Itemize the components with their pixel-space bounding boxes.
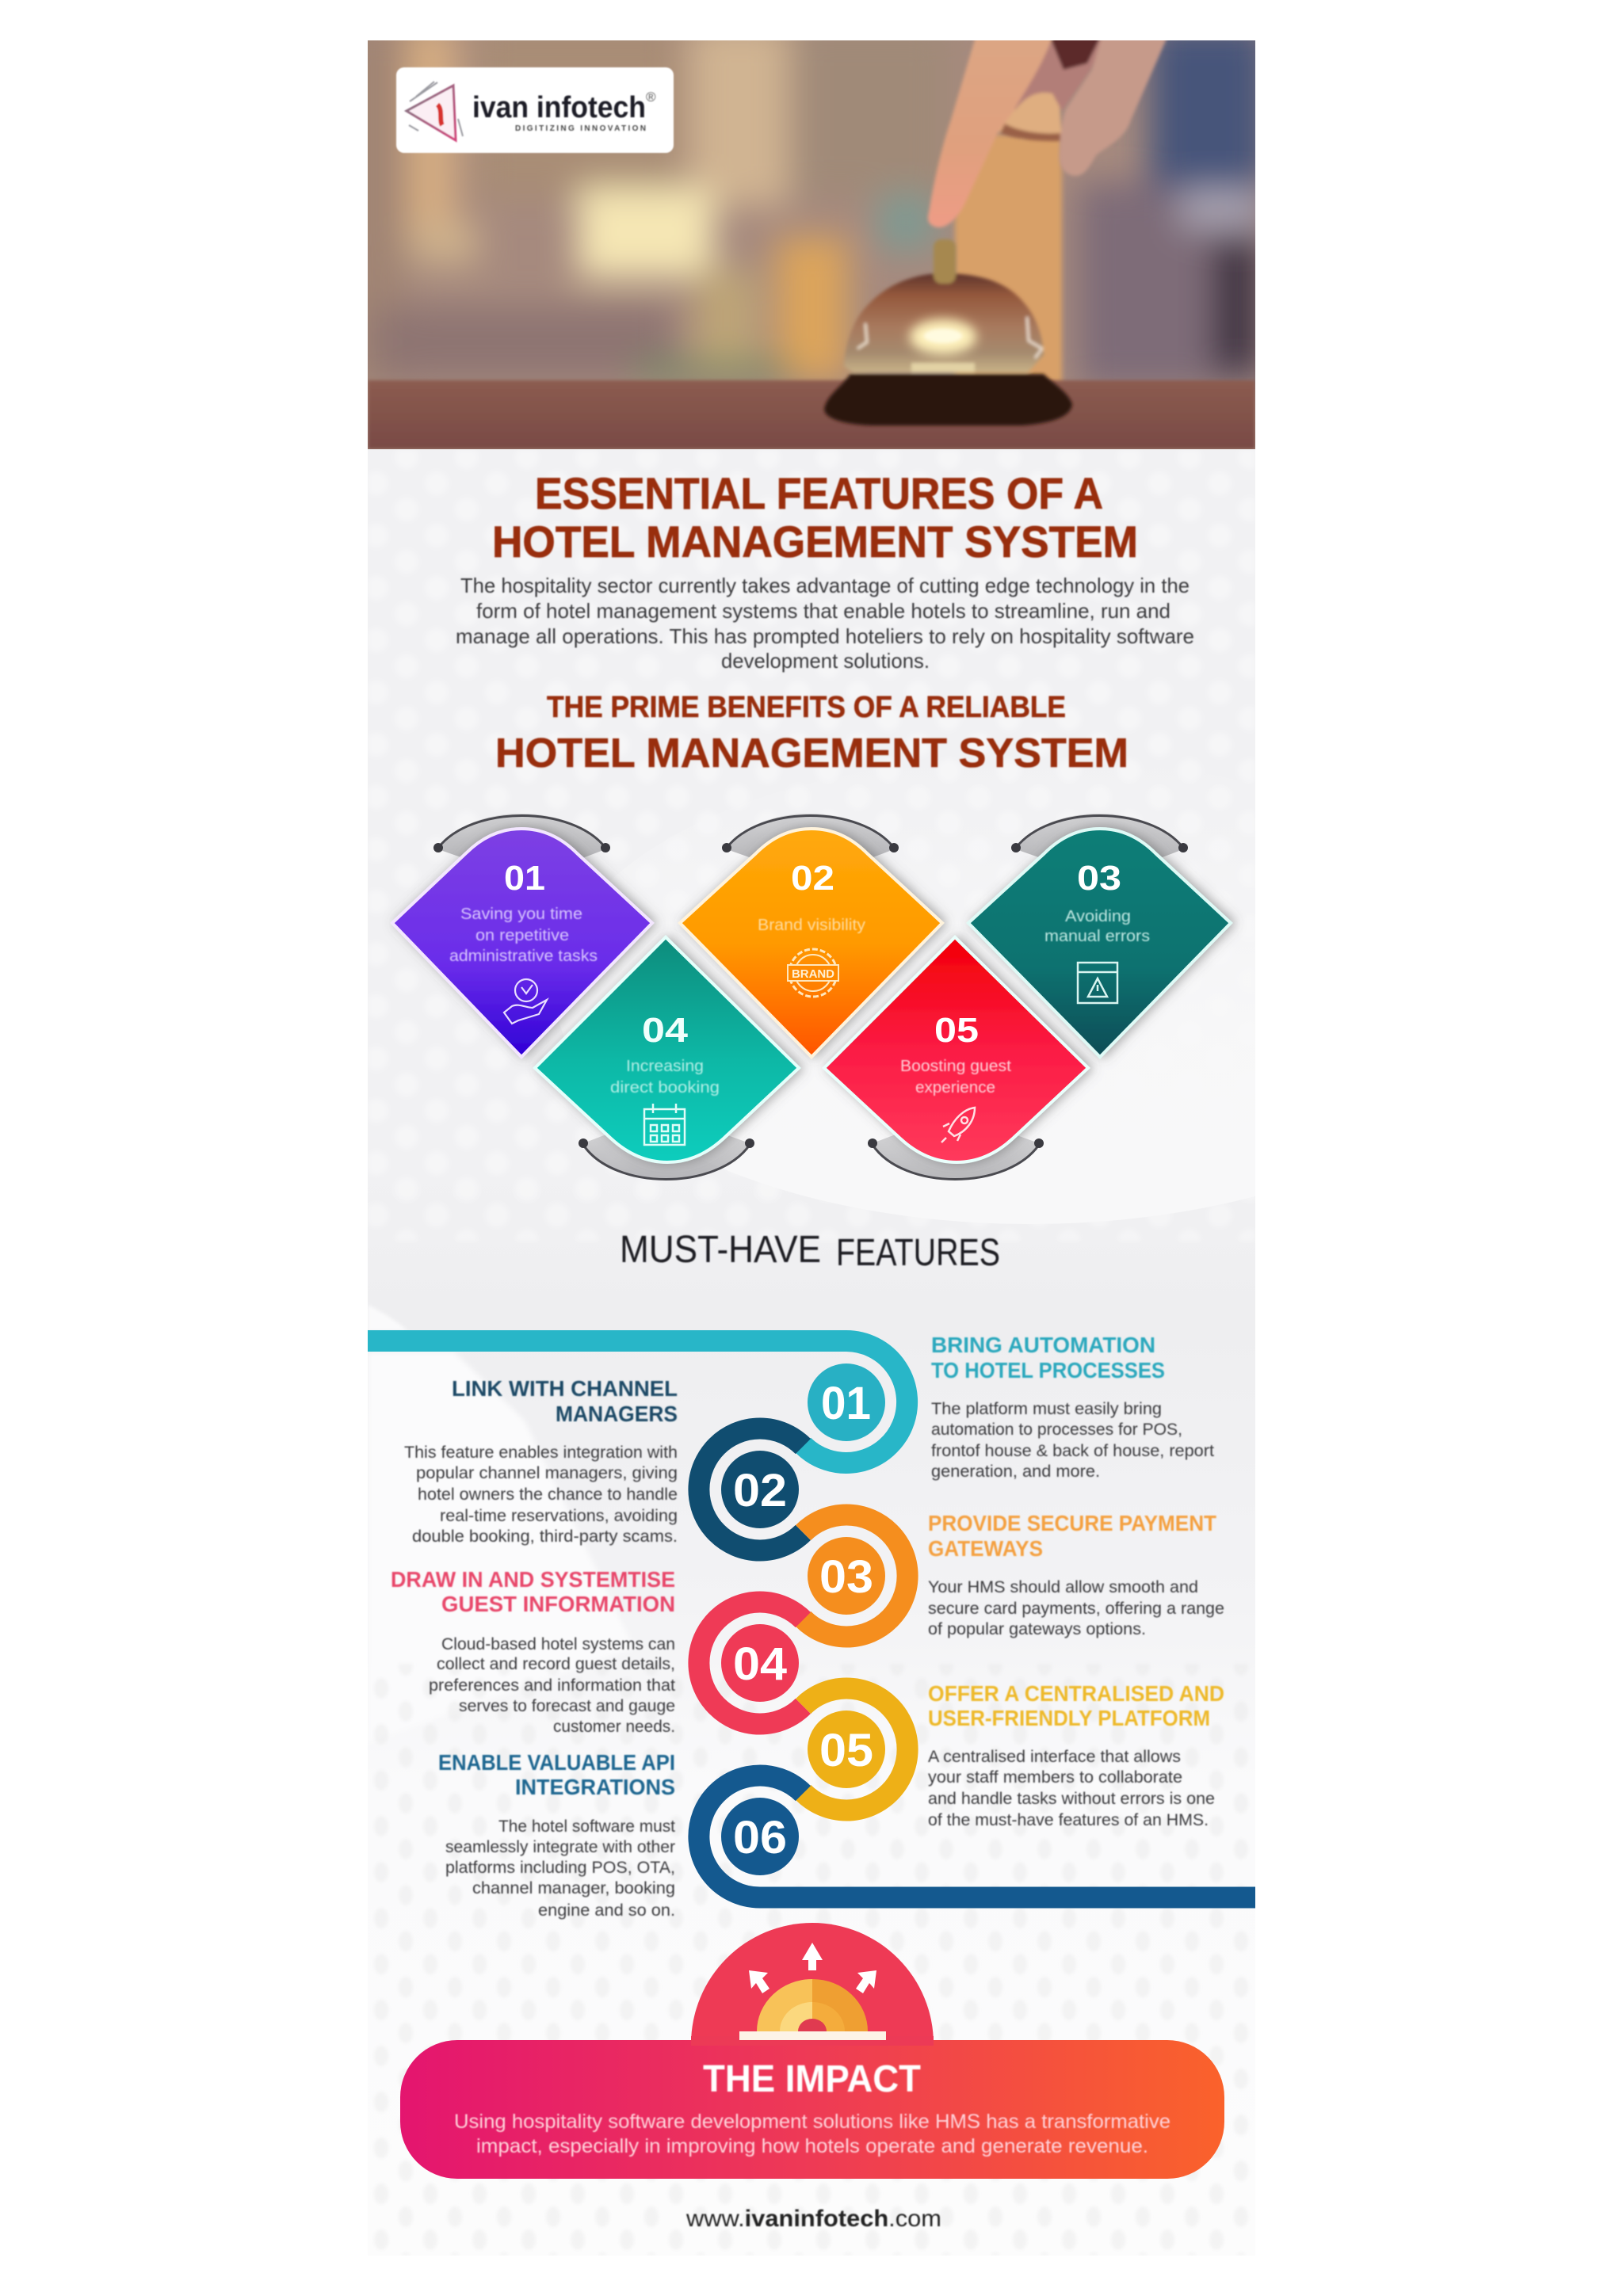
diamond 02 [680,829,942,1057]
feature 06: API integrations: platforms including POS, OTA, [445,1859,675,1877]
diamond 05 [824,937,1088,1162]
feature 01: automation [931,1333,1214,1481]
feature 03: secure payment [928,1511,1224,1638]
logo card [396,67,674,153]
impact bar [400,2040,1224,2179]
intro paragraph [456,574,1194,673]
node 05: 05 [819,1725,873,1776]
impact text: impact, especially in improving how hotels operate and generate revenue. [476,2135,1148,2157]
feature 06: API integrations: seamlessly integrate with other [445,1838,675,1856]
diamond 02: 02 [791,859,834,898]
feature 01: automation: generation, and more. [931,1463,1100,1481]
feature 03: secure payment: PROVIDE SECURE PAYMENT [928,1511,1216,1535]
path segments [368,1341,1255,1897]
feature 03: secure payment: secure card payments, offering a range [928,1600,1224,1618]
heading: must-have features [620,1229,1000,1274]
node 01 [808,1363,885,1441]
orange pillar behind finger [955,135,1062,388]
node 04 [721,1624,799,1702]
heading: must-have features: MUST-HAVE [620,1229,821,1271]
feature 06: API integrations: The hotel software must [498,1817,675,1836]
feature 02: channel managers: LINK WITH CHANNEL [452,1376,678,1401]
node 04: 04 [733,1638,787,1690]
top and bottom arcs [433,814,1188,1180]
intro paragraph: development solutions. [721,649,930,673]
background panel [368,449,1255,2249]
feature 04: guest information: DRAW IN AND SYSTEMTISE [391,1567,675,1592]
benefits diamonds [392,814,1231,1180]
feature 02: channel managers: This feature enables integration with [404,1444,678,1462]
hand pressing the bell [928,32,1170,227]
feature 03: secure payment: Your HMS should allow smooth and [928,1578,1198,1596]
feature 06: API integrations: engine and so on. [538,1901,675,1920]
main title [492,468,1138,566]
diamond 03 [968,829,1231,1057]
main title: HOTEL MANAGEMENT SYSTEM [492,517,1138,566]
impact panel [400,1923,1224,2179]
subheading: prime benefits: THE PRIME BENEFITS OF A RELIABLE [547,691,1066,724]
diamond 04: direct booking [610,1079,720,1097]
feature 04: guest information: customer needs. [553,1718,675,1736]
feature 02: channel managers: double booking, third-party scams. [412,1527,678,1546]
feature 04: guest information: Cloud-based hotel systems can [441,1635,675,1653]
feature 03: secure payment: of popular gateways options. [928,1620,1146,1638]
diamond 03: manual errors [1044,928,1150,945]
node 06: 06 [733,1812,787,1863]
diamond 01: Saving you time [460,906,582,923]
feature 04: guest information [391,1567,675,1736]
diamond 01: 01 [504,859,545,898]
feature 01: automation: frontof house & back of house, report [931,1442,1214,1460]
icon: clock in hand [504,979,547,1024]
dome [691,1923,934,2044]
main title: ESSENTIAL FEATURES OF A [535,468,1103,518]
impact heading: THE IMPACT [703,2058,921,2100]
node 05 [808,1711,885,1788]
feature 05: centralised platform: of the must-have features of an HMS. [928,1811,1209,1829]
registered mark: ® [646,90,656,105]
diamond 04: 04 [642,1011,689,1050]
logo tagline: DIGITIZING INNOVATION [515,124,646,133]
heading: must-have features: FEATURES [836,1232,1000,1274]
intro paragraph: manage all operations. This has prompted hoteliers to rely on hospitality software [456,624,1194,648]
feature 02: channel managers: popular channel managers, giving [416,1464,678,1482]
diamond 01 [392,829,652,1057]
feature 03: secure payment: GATEWAYS [928,1536,1043,1561]
feature 06: API integrations [438,1750,675,1920]
feature 05: centralised platform [928,1681,1224,1829]
diamond 01: on repetitive [475,927,569,944]
node 03: 03 [819,1551,873,1603]
feature 04: guest information: GUEST INFORMATION [441,1592,675,1616]
diamond 04: Increasing [626,1058,704,1075]
diamond 05: Boosting guest [900,1058,1011,1075]
feature 05: centralised platform: USER-FRIENDLY PLATFORM [928,1706,1210,1730]
icon: megaphone triangle [407,82,463,140]
icon: warning window [1078,963,1117,1003]
subheading: prime benefits: HOTEL MANAGEMENT SYSTEM [495,730,1128,776]
feature 06: API integrations: channel manager, booking [472,1879,675,1897]
hero photo: hotel desk bell [349,24,1268,449]
node 01: 01 [821,1378,871,1429]
feature 01: automation: automation to processes for POS, [931,1421,1182,1439]
feature 06: API integrations: INTEGRATIONS [515,1775,675,1799]
node 02: 02 [733,1465,787,1516]
website url: www.ivaninfotech.com [685,2206,941,2232]
subheading: prime benefits [495,691,1128,776]
icon: calendar [644,1104,685,1145]
icon: brand badge [788,949,838,997]
intro paragraph: form of hotel management systems that enable hotels to streamline, run and [476,599,1170,623]
diamond 02: Brand visibility [758,917,865,934]
feature 06: API integrations: ENABLE VALUABLE API [438,1750,675,1775]
diamond 05: 05 [934,1011,979,1050]
impact text [454,2111,1170,2157]
feature 05: centralised platform: A centralised interface that allows [928,1748,1181,1766]
feature 05: centralised platform: your staff members to collaborate [928,1768,1182,1787]
diamond 03: 03 [1077,859,1121,898]
diamond 03: Avoiding [1065,908,1131,925]
diamond 05: experience [915,1079,995,1097]
serpentine timeline [368,1341,1255,1897]
icon: rocket [941,1108,975,1142]
node 03 [808,1537,885,1615]
impact text: Using hospitality software development solutions like HMS has a transformative [454,2111,1170,2133]
node 02 [721,1451,799,1528]
feature 05: centralised platform: OFFER A CENTRALISED AND [928,1681,1224,1706]
feature 02: channel managers [404,1376,678,1546]
diamond 04 [535,937,799,1162]
bell [824,239,1072,425]
icon: brand badge: BRAND [792,967,834,981]
logo wordmark: ivan infotech [472,91,646,124]
feature 04: guest information: preferences and information that [429,1676,675,1695]
feature 04: guest information: serves to forecast and gauge [459,1697,675,1715]
feature 01: automation: TO HOTEL PROCESSES [931,1358,1165,1383]
feature 01: automation: The platform must easily bring [931,1400,1162,1418]
feature 02: channel managers: hotel owners the chance to handle [418,1486,678,1504]
feature 02: channel managers: MANAGERS [556,1402,678,1426]
intro paragraph: The hospitality sector currently takes advantage of cutting edge technology in the [460,574,1190,597]
icon: rising sun with arrows [739,1943,886,2040]
feature 05: centralised platform: and handle tasks without errors is one [928,1790,1215,1808]
node 06 [721,1798,799,1875]
feature 04: guest information: collect and record guest details, [437,1655,675,1673]
feature 02: channel managers: real-time reservations, avoiding [440,1507,678,1525]
feature 01: automation: BRING AUTOMATION [931,1333,1155,1357]
diamond 01: administrative tasks [449,948,598,965]
